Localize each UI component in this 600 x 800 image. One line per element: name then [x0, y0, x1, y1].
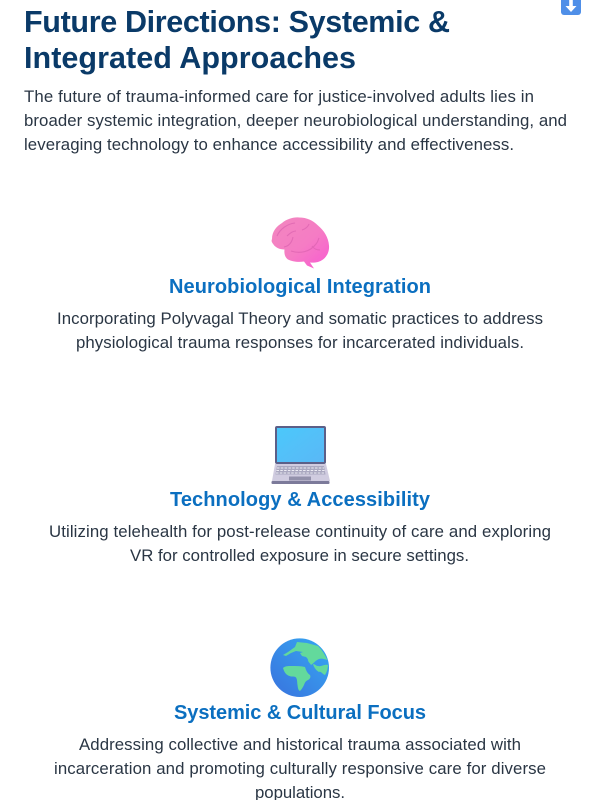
icon: laptop: [272, 426, 330, 484]
panel: neurobiological integration: [57, 217, 543, 352]
heading: Technology & Accessibility: [170, 489, 431, 511]
description: Addressing collective and historical trauma associated with: [79, 735, 521, 754]
description: Incorporating Polyvagal Theory and somatic practices to address: [57, 309, 543, 328]
panel: technology and accessibility: [49, 426, 551, 565]
heading: Neurobiological Integration: [169, 276, 431, 298]
description: incarceration and promoting culturally responsive care for diverse: [54, 759, 546, 778]
description: [57, 309, 543, 352]
description: VR for controlled exposure in secure settings.: [130, 546, 469, 565]
intro text: leveraging technology to enhance accessibility and effectiveness.: [24, 135, 514, 154]
intro text: broader systemic integration, deeper neurobiological understanding, and: [24, 111, 567, 130]
panel: systemic and cultural focus: [54, 638, 546, 800]
icon: download arrow: [561, 0, 581, 15]
intro text: [24, 87, 567, 154]
description: Utilizing telehealth for post-release continuity of care and exploring: [49, 522, 551, 541]
icon: globe: [270, 638, 329, 697]
intro text: The future of trauma-informed care for justice-involved adults lies in: [24, 87, 534, 106]
title: [24, 5, 450, 75]
description: [49, 522, 551, 565]
title: Future Directions: Systemic &: [24, 5, 450, 39]
description: [54, 735, 546, 800]
description: physiological trauma responses for incarcerated individuals.: [76, 333, 524, 352]
heading: Systemic & Cultural Focus: [174, 702, 426, 724]
title: Integrated Approaches: [24, 41, 356, 75]
icon: brain: [272, 217, 329, 268]
